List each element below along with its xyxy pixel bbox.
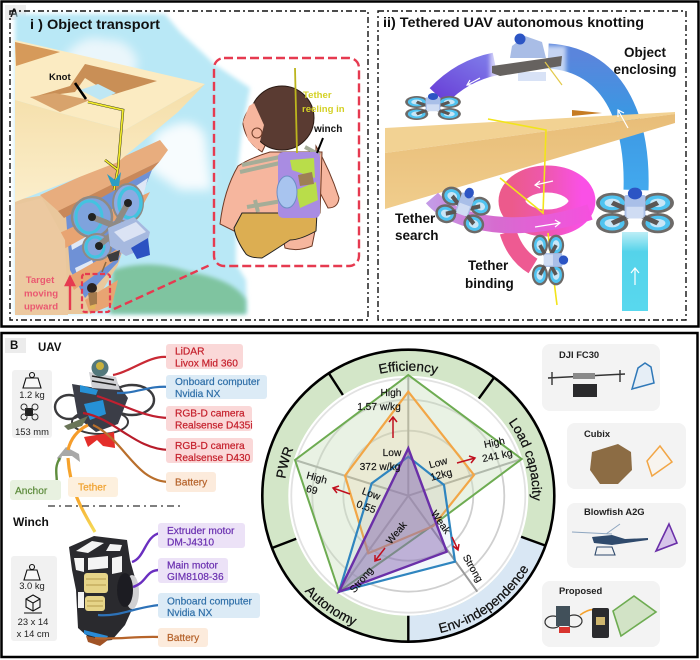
load range labels: Low xyxy=(428,456,449,471)
UAV heading: UAV xyxy=(38,342,62,354)
tether label xyxy=(68,477,118,497)
right dashed frame xyxy=(378,11,686,320)
sector dividers xyxy=(272,373,546,642)
card: DJI FC30: DJI FC30 xyxy=(559,349,599,360)
dash-dot separator xyxy=(48,505,182,507)
courtyard wall xyxy=(30,64,157,98)
panel label B xyxy=(5,338,26,353)
card: Proposed xyxy=(542,581,660,647)
radar chart xyxy=(261,348,556,643)
cubix polygon xyxy=(345,392,474,553)
winch spec card: x 14 cm xyxy=(17,628,50,639)
building wall xyxy=(15,168,150,314)
PWR range labels xyxy=(305,471,382,516)
UAV spec card xyxy=(12,370,52,438)
roof surface xyxy=(15,40,205,130)
Blowfish profile xyxy=(656,524,677,551)
PWR range labels: Low xyxy=(360,486,382,503)
connector onboard computer xyxy=(117,387,170,393)
connector winch computer xyxy=(98,605,160,615)
load range labels: High xyxy=(483,436,506,451)
cloud right of building xyxy=(150,122,212,190)
icon: tether curve xyxy=(580,610,595,615)
panel: tethered UAV autonomous knotting xyxy=(383,14,677,311)
tether reeling caption: reeling in xyxy=(302,104,345,115)
ring titles xyxy=(276,360,542,633)
env range labels xyxy=(428,509,485,585)
proposed profile xyxy=(613,596,656,636)
caption tether search: search xyxy=(395,228,439,243)
onboard computer label: Nvidia NX xyxy=(175,389,220,400)
autonomy range labels xyxy=(348,519,410,595)
section title ii: ii) Tethered UAV autonomous knotting xyxy=(383,14,644,30)
pink torus xyxy=(512,179,582,223)
magenta tail xyxy=(432,198,590,225)
winch battery label: Battery xyxy=(167,633,200,644)
camera D430 label: Realsense D430 xyxy=(175,453,251,464)
efficiency range labels: High xyxy=(381,388,401,399)
tether on building xyxy=(88,102,123,190)
large drone xyxy=(72,184,150,272)
ledge underside xyxy=(58,161,160,218)
caption tether binding: binding xyxy=(465,276,514,291)
winch pointer xyxy=(317,138,323,153)
load range labels: 12kg xyxy=(429,467,454,484)
PWR range labels: High xyxy=(305,471,328,487)
Cubix profile xyxy=(647,446,672,476)
wall shadow strip xyxy=(15,198,68,315)
efficiency range labels: 1.57 w/kg xyxy=(357,402,401,413)
drone top xyxy=(492,34,562,85)
winch photo xyxy=(69,536,139,646)
winch battery label xyxy=(158,628,208,647)
direction arrows xyxy=(467,78,639,285)
LiDAR label: LiDAR xyxy=(175,346,204,358)
icon: DJI drone photo xyxy=(548,370,625,397)
ring titles: Autonomy xyxy=(304,587,357,626)
anchor connector xyxy=(55,458,60,488)
pink lobe xyxy=(508,232,533,266)
panel A frame xyxy=(2,2,698,326)
card: Blowfish A2G: Blowfish A2G xyxy=(584,506,645,517)
target caption: upward xyxy=(24,302,58,312)
load range labels xyxy=(428,436,514,484)
env range labels: Strong xyxy=(460,553,485,585)
connector lidar xyxy=(113,357,167,375)
card: Proposed: Proposed xyxy=(559,585,603,596)
cyan rising tube xyxy=(622,232,648,311)
winch computer label: Nvidia NX xyxy=(167,608,212,619)
caption tether search: Tether xyxy=(395,211,436,226)
courtyard opening xyxy=(80,84,116,100)
range arrows xyxy=(333,417,475,561)
connector camera two xyxy=(83,413,170,450)
target box xyxy=(82,274,110,312)
knot pointer xyxy=(75,83,86,99)
ring band xyxy=(275,363,541,629)
white haze around drones xyxy=(490,46,566,84)
efficiency range labels: Low xyxy=(383,448,402,459)
onboard computer label: Onboard computer xyxy=(175,377,261,388)
connector winch battery xyxy=(95,637,160,639)
figure with backpack xyxy=(220,86,339,258)
proposed polygon xyxy=(295,375,522,592)
caption object enclosing: Object xyxy=(624,45,667,60)
ring titles: PWR xyxy=(276,447,294,478)
battery label xyxy=(166,472,216,492)
axes xyxy=(295,375,522,592)
sky background xyxy=(15,14,250,314)
drone left xyxy=(433,179,495,236)
extruder label: Extruder motor xyxy=(167,526,235,537)
knot label: Knot xyxy=(49,72,71,83)
ring titles: Load capacity xyxy=(508,418,542,501)
efficiency range labels xyxy=(357,388,402,473)
winch computer label: Onboard computer xyxy=(167,596,253,608)
upper ledge xyxy=(40,140,168,211)
roof wedge xyxy=(572,110,602,116)
orange floor slabs xyxy=(55,192,150,314)
winch label: winch xyxy=(313,124,342,135)
UAV spec card: 1.2 kg xyxy=(19,389,45,400)
tether reeling line xyxy=(295,68,297,153)
winch computer label xyxy=(158,593,260,619)
DJI polygon xyxy=(339,457,455,592)
left dashed frame xyxy=(10,11,368,320)
small target figure xyxy=(87,283,97,309)
window highlights xyxy=(70,178,148,284)
UAV photo xyxy=(55,360,154,448)
autonomy range labels: Weak xyxy=(385,519,410,547)
foliage xyxy=(110,264,246,314)
plank top face xyxy=(385,112,675,153)
blowfish polygon xyxy=(339,448,447,592)
anchor label xyxy=(10,480,61,500)
icon: Cubix photo xyxy=(590,444,632,484)
panel label A: A xyxy=(10,8,18,20)
panel B frame xyxy=(2,333,698,657)
PWR range labels: 0.55 xyxy=(355,499,377,516)
card: DJI FC30 xyxy=(542,344,660,411)
butterfly anchor xyxy=(107,172,121,186)
ring titles: Env-independence xyxy=(438,566,528,633)
main motor label: Main motor xyxy=(167,560,219,572)
tether orange cable xyxy=(68,425,95,532)
courtyard floor xyxy=(30,93,90,112)
anchor piece xyxy=(57,447,80,462)
camera D430 label: RGB-D camera xyxy=(175,441,245,452)
anchor label: Anchor xyxy=(15,486,48,497)
connector battery xyxy=(93,425,170,482)
winch spec card xyxy=(11,556,57,641)
panel label B: B xyxy=(10,340,18,352)
outer ring xyxy=(262,350,554,642)
load range labels: 241 kg xyxy=(481,448,514,465)
tether reeling caption: Tether xyxy=(303,90,332,101)
extruder label: DM-J4310 xyxy=(167,538,214,548)
camera D430 label xyxy=(166,438,253,464)
onboard computer label xyxy=(166,375,267,400)
camera D435i label: RGB-D camera xyxy=(175,408,245,420)
main motor label: GIM8108-36 xyxy=(167,572,224,583)
autonomy range labels: Strong xyxy=(348,565,376,595)
LiDAR label xyxy=(166,344,243,370)
efficiency range labels: 372 w/kg xyxy=(360,462,401,473)
roof corner notch xyxy=(15,42,60,66)
icon: helicopter photo xyxy=(572,524,648,555)
target caption: moving xyxy=(24,288,58,300)
drone bottom xyxy=(532,235,568,285)
connector main motor xyxy=(133,570,160,587)
plank front face xyxy=(385,114,675,209)
card: Blowfish A2G xyxy=(567,503,686,568)
grid circles xyxy=(291,379,525,613)
roof front wall xyxy=(15,84,205,202)
backpack winch xyxy=(277,152,320,218)
caption object enclosing: enclosing xyxy=(613,62,677,77)
section title i: i ) Object transport xyxy=(30,16,160,32)
winch heading: Winch xyxy=(13,515,49,529)
winch spec card: 3.0 kg xyxy=(19,580,45,591)
drone right xyxy=(596,188,674,233)
battery label: Battery xyxy=(175,478,208,488)
tether label: Tether xyxy=(78,482,107,494)
card: Cubix xyxy=(567,423,686,489)
target caption: Target xyxy=(26,275,55,286)
env-independence band xyxy=(408,537,546,642)
caption tether binding: Tether xyxy=(468,258,509,273)
LiDAR label: Livox Mid 360 xyxy=(175,358,238,370)
card: Cubix: Cubix xyxy=(584,428,611,439)
target arrow xyxy=(66,277,74,310)
icon: mini winch xyxy=(592,608,609,638)
tether on plank xyxy=(488,119,557,305)
main motor label xyxy=(158,558,228,583)
UAV spec card: 153 mm xyxy=(15,426,49,437)
ring titles: Efficiency xyxy=(378,360,438,376)
cloud behind building xyxy=(65,38,138,90)
camera D435i label: Realsense D435i xyxy=(175,420,253,432)
harness xyxy=(240,147,320,212)
drone top-left xyxy=(405,93,461,120)
env range labels: Weak xyxy=(428,509,452,537)
purple flight tube xyxy=(438,64,495,96)
panel label A xyxy=(5,5,26,20)
zoom connector xyxy=(114,265,210,309)
DJI profile xyxy=(632,363,654,389)
zoom box xyxy=(214,58,359,266)
icon: mini UAV xyxy=(545,606,582,633)
connector camera one xyxy=(97,396,170,418)
panel: object transport xyxy=(15,14,359,315)
PWR range labels: 69 xyxy=(305,484,319,497)
winch spec card: 23 x 14 xyxy=(18,616,48,627)
extruder label xyxy=(158,523,245,548)
blue flight tube xyxy=(548,56,636,190)
window band xyxy=(66,170,152,298)
connector extruder motor xyxy=(132,533,160,562)
camera D435i label xyxy=(166,406,253,432)
